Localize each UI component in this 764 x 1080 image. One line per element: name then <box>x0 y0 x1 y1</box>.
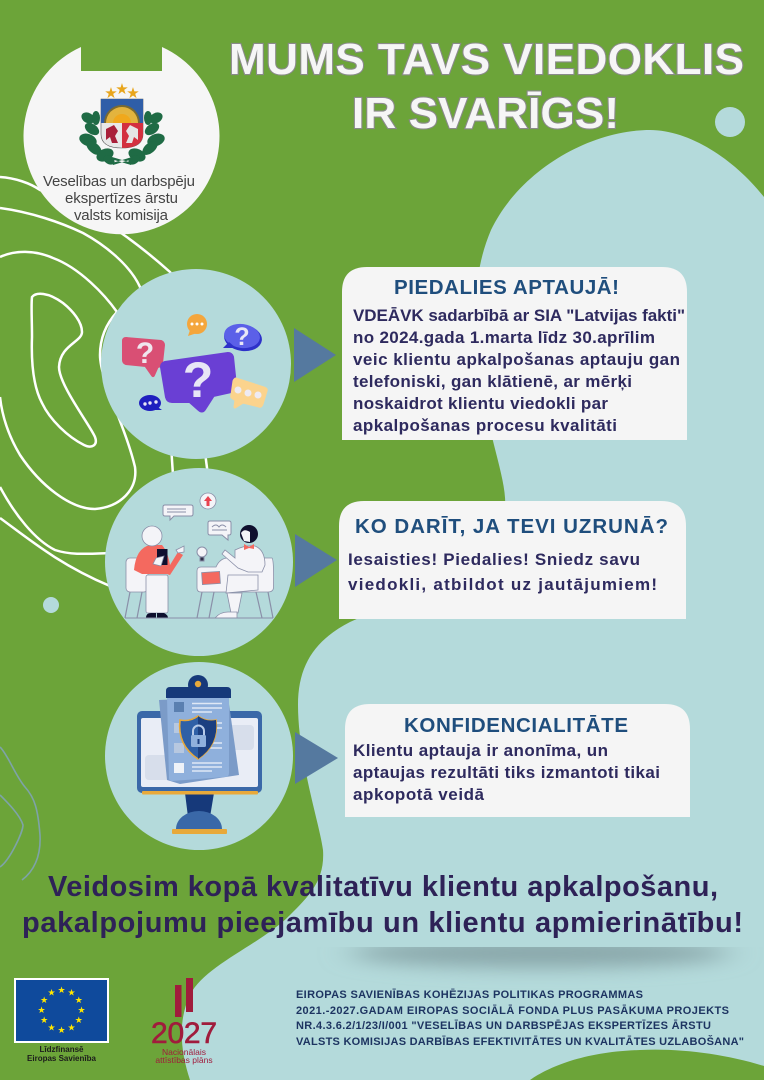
icon: speech bubble left <box>163 505 193 520</box>
icon: pink question bubble <box>124 337 163 375</box>
icon: light bulb <box>197 547 207 561</box>
logo: EU flag: ★ <box>67 1022 76 1032</box>
text block: veic klientu apkalpošanas aptauju gan <box>353 350 680 369</box>
text block: Iesaisties! Piedalies! Sniedz savu <box>348 550 640 569</box>
footer project text: NR.4.3.6.2/1/23/I/001 "VESELĪBAS UN DARBSPĒJAS EKSPERTĪZES ĀRSTU <box>296 1020 711 1032</box>
icon: yellow bubble <box>232 379 266 407</box>
logo: EU flag: ★ <box>57 1025 66 1035</box>
text block: noskaidrot klientu viedokli par <box>353 394 608 413</box>
logo: national development plan 2027: 2027 <box>151 1017 217 1050</box>
icon: monitor <box>137 711 262 834</box>
panel: circle with two people talking <box>105 468 293 656</box>
text block <box>353 741 660 804</box>
panel: circle with question bubbles <box>101 269 291 459</box>
icon: orange bubble <box>187 314 207 336</box>
text block: apkalpošanas procesu kvalitāti <box>353 416 617 435</box>
footer project text: 2021.-2027.GADAM EIROPAS SOCIĀLĀ FONDA PLUS PASĀKUMA PROJEKTS <box>296 1005 729 1017</box>
text block: apkopotā veidā <box>353 785 485 804</box>
logo text: ekspertīzes ārstu <box>65 190 178 207</box>
logo: commission emblem badge <box>24 47 220 234</box>
icon: large purple question bubble: ? <box>183 352 213 408</box>
logo text: Veselības un darbspēju <box>43 173 195 190</box>
logo: EU flag: ★ <box>37 1005 46 1015</box>
closing call to action: pakalpojumu pieejamību un klientu apmierinātību! <box>22 907 743 939</box>
arrow 2 <box>295 534 337 587</box>
dot: left <box>43 597 59 613</box>
logo: EU flag: ★ <box>40 1015 48 1025</box>
panel: what to do if approached <box>339 501 686 619</box>
logo text <box>43 173 195 224</box>
heading: KONFIDENCIALITĀTE <box>404 714 628 737</box>
arrow 3 <box>295 732 338 784</box>
panel: confidentiality <box>345 704 690 817</box>
icon: coat of arms: ★ <box>104 85 118 102</box>
icon: dark blue bubble <box>139 395 162 411</box>
icon: pink question bubble: ? <box>136 337 154 370</box>
logo: EU flag: Līdzfinansē <box>39 1045 84 1054</box>
icon: large purple question bubble <box>162 352 235 410</box>
logo: EU flag: ★ <box>77 1005 86 1015</box>
logo: EU flag: ★ <box>47 988 56 998</box>
closing call to action <box>22 871 743 939</box>
text block <box>353 306 685 435</box>
shadow under closing text <box>350 938 730 968</box>
logo: national development plan 2027: attīstības plāns <box>155 1055 213 1065</box>
icon: blue question bubble <box>222 322 264 354</box>
logo: EU flag: ★ <box>75 995 83 1005</box>
logo: EU flag: ★ <box>57 985 66 995</box>
illustration: ground line <box>125 617 273 619</box>
arrow 1 <box>294 328 336 382</box>
panel: take part in the survey <box>342 267 687 440</box>
heading: KO DARĪT, JA TEVI UZRUNĀ? <box>355 515 668 538</box>
logo: EU flag: ★ <box>67 988 76 998</box>
illustration: right person in chair <box>197 525 274 618</box>
text block: aptaujas rezultāti tiks izmantoti tikai <box>353 763 660 782</box>
icon: coat of arms <box>77 81 167 166</box>
illustration: left person in chair <box>125 526 184 618</box>
footer project text: EIROPAS SAVIENĪBAS KOHĒZIJAS POLITIKAS PROGRAMMAS <box>296 989 643 1001</box>
logo: EU flag: ★ <box>40 995 48 1005</box>
closing call to action: Veidosim kopā kvalitatīvu klientu apkalpošanu, <box>48 871 718 903</box>
footer project text <box>296 989 744 1048</box>
icon: coat of arms: ★ <box>115 81 129 98</box>
icon: clipboard with documents <box>159 675 239 784</box>
text block: VDEĀVK sadarbībā ar SIA "Latvijas fakti" <box>353 306 685 325</box>
title <box>229 35 744 138</box>
footer project text: VALSTS KOMISIJAS DARBĪBAS EFEKTIVITĀTES UN KVALITĀTES UZLABOŠANA" <box>296 1035 744 1048</box>
icon: speech bubble right <box>208 521 231 540</box>
dot: top right <box>715 107 745 137</box>
background: light blue blob <box>182 130 764 1080</box>
text block <box>348 550 657 594</box>
logo: EU flag: ★ <box>75 1015 83 1025</box>
logo text: valsts komisija <box>74 207 169 224</box>
logo: EU flag: Eiropas Savienība <box>27 1054 97 1063</box>
panel: circle with monitor and secure clipboard <box>105 662 293 850</box>
title: IR SVARĪGS! <box>352 89 619 138</box>
decorative faint contour lines <box>0 747 40 880</box>
logo: national development plan 2027: Nacionālais <box>162 1047 206 1057</box>
icon: blue question bubble: ? <box>234 323 250 351</box>
logo: EU flag: ★ <box>47 1022 56 1032</box>
icon: arrow badge <box>200 493 216 509</box>
icon: shield with padlock <box>180 716 216 759</box>
heading: PIEDALIES APTAUJĀ! <box>394 276 619 299</box>
logo: EU flag <box>14 978 109 1063</box>
text block: no 2024.gada 1.marta līdz 30.aprīlim <box>353 328 655 347</box>
logo: national development plan 2027 <box>151 978 217 1065</box>
decorative white contour lines <box>0 177 208 586</box>
title: MUMS TAVS VIEDOKLIS <box>229 35 744 84</box>
text block: telefoniski, gan klātienē, ar mērķi <box>353 372 632 391</box>
text block: Klientu aptauja ir anonīma, un <box>353 741 608 760</box>
icon: coat of arms: ★ <box>126 85 140 102</box>
text block: viedokli, atbildot uz jautājumiem! <box>348 575 657 594</box>
